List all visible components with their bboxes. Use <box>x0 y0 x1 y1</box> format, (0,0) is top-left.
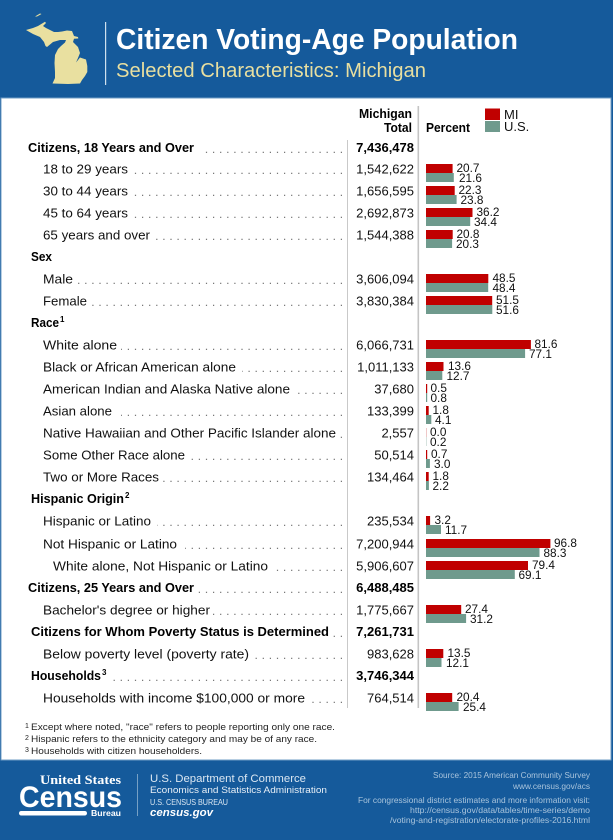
footnotes: 1 <box>25 723 29 730</box>
source text: http://census.gov/data/tables/time-series/demo <box>410 805 590 815</box>
row: Native Hawaiian and Other Pacific Islander alone: Native Hawaiian and Other Pacific Islander alone <box>43 426 336 441</box>
row: Households: 3 <box>102 668 107 677</box>
row: Female: 51.6 <box>496 303 519 317</box>
row: American Indian and Alaska Native alone: 37,680 <box>374 381 414 396</box>
row: White alone, Not Hispanic or Latino <box>53 558 555 582</box>
icon: Michigan map <box>26 14 87 84</box>
divider: logo rule <box>136 774 139 816</box>
row: Asian alone: 1.8 <box>432 403 449 417</box>
row: Native Hawaiian and Other Pacific Islander alone: 0.0 <box>430 425 447 439</box>
heading: Hispanic Origin: 2 <box>125 491 130 500</box>
logo: United States Census Bureau: Census <box>19 781 122 814</box>
footnotes: 3 <box>25 747 29 754</box>
row: Not Hispanic or Latino: Not Hispanic or Latino <box>43 537 177 552</box>
column heading: Michigan Total: Total <box>384 120 412 135</box>
row: Hispanic or Latino: 235,534 <box>367 513 414 528</box>
row: 45 to 64 years <box>43 205 499 229</box>
heading: Race: Race <box>31 315 59 330</box>
row: Asian alone: Asian alone <box>43 404 112 419</box>
row: Some Other Race alone: Some Other Race alone <box>43 448 185 463</box>
row: Some Other Race alone: 0.7 <box>431 447 447 461</box>
row: 65 years and over: 20.8 <box>456 227 480 241</box>
row: White alone, Not Hispanic or Latino: 5,906,607 <box>356 558 414 573</box>
logo: United States Census Bureau <box>19 772 122 818</box>
row: 18 to 29 years: 18 to 29 years <box>43 162 129 177</box>
row: Two or More Races: Two or More Races <box>43 470 160 485</box>
row: Two or More Races <box>43 469 449 493</box>
row: Bachelor's degree or higher: 31.2 <box>470 612 493 626</box>
row: Female <box>43 293 519 317</box>
row: Hispanic or Latino: Hispanic or Latino <box>43 514 151 529</box>
column heading: Michigan Total <box>359 106 412 135</box>
row: White alone: 77.1 <box>529 347 552 361</box>
row: Black or African American alone: 13.6 <box>448 359 471 373</box>
logo: United States Census Bureau: United States <box>40 772 121 787</box>
footnotes: Households with citizen householders. <box>31 746 202 757</box>
row: Male: 3,606,094 <box>356 271 414 286</box>
column rules <box>347 106 419 708</box>
source text: Source: 2015 American Community Survey <box>433 770 591 780</box>
row: White alone: White alone <box>43 338 117 353</box>
row: White alone, Not Hispanic or Latino: 69.1 <box>518 568 541 582</box>
heading: Hispanic Origin: Hispanic Origin <box>31 491 124 506</box>
row: Citizens, 25 Years and Over: 6,488,485 <box>356 580 414 595</box>
row: 45 to 64 years: 2,692,873 <box>356 205 414 220</box>
row: Households with income $100,000 or more: 20.4 <box>456 690 480 704</box>
row: Some Other Race alone: 50,514 <box>374 447 414 462</box>
row: Asian alone <box>43 403 451 427</box>
heading: Race: 1 <box>60 315 65 324</box>
row: Bachelor's degree or higher: 1,775,667 <box>356 602 414 617</box>
row: Asian alone: 4.1 <box>435 413 451 427</box>
row: Female: 3,830,384 <box>356 293 414 308</box>
row: Male: 48.4 <box>492 281 516 295</box>
row: White alone, Not Hispanic or Latino: White alone, Not Hispanic or Latino <box>53 559 268 574</box>
row: 45 to 64 years: 45 to 64 years <box>43 206 129 221</box>
footnotes: 2 <box>25 735 29 742</box>
row: Male: 48.5 <box>492 271 516 285</box>
title: Citizen Voting-Age Population <box>116 24 518 56</box>
row: 65 years and over: 1,544,388 <box>356 227 414 242</box>
row: Hispanic or Latino: 3.2 <box>434 513 451 527</box>
row: Bachelor's degree or higher: Bachelor's degree or higher <box>43 603 211 618</box>
row: 30 to 44 years: 30 to 44 years <box>43 184 129 199</box>
row: Citizens, 18 Years and Over: Citizens, 18 Years and Over <box>28 140 194 155</box>
row: Hispanic or Latino <box>43 513 467 537</box>
source text: www.census.gov/acs <box>512 781 590 791</box>
row: American Indian and Alaska Native alone <box>43 381 447 405</box>
row: Below poverty level (poverty rate) <box>43 646 471 670</box>
department text <box>150 773 327 819</box>
row: Not Hispanic or Latino <box>43 536 577 560</box>
row: Bachelor's degree or higher <box>43 602 493 626</box>
row: Bachelor's degree or higher: 27.4 <box>465 602 488 616</box>
row: Households with income $100,000 or more <box>43 690 486 714</box>
row: Two or More Races: 134,464 <box>367 469 414 484</box>
row: Citizens, 18 Years and Over <box>28 140 414 155</box>
row: White alone: 6,066,731 <box>356 337 414 352</box>
footnotes: Hispanic refers to the ethnicity category and may be of any race. <box>31 734 317 745</box>
row: Female: 51.5 <box>496 293 519 307</box>
source text: /voting-and-registration/electorate-profiles-2016.html <box>390 815 590 825</box>
source text: For congressional district estimates and more information visit: <box>358 795 590 805</box>
row: White alone: 81.6 <box>534 337 558 351</box>
panel: white table area <box>1 98 611 760</box>
row: Below poverty level (poverty rate): 983,628 <box>367 646 414 661</box>
row: 18 to 29 years: 20.7 <box>456 161 479 175</box>
row: 65 years and over <box>43 227 480 251</box>
row: Citizens, 25 Years and Over <box>28 580 414 595</box>
row: Two or More Races: 1.8 <box>432 469 449 483</box>
row: Two or More Races: 2.2 <box>432 479 449 493</box>
row: Not Hispanic or Latino: 7,200,944 <box>356 536 414 551</box>
row: Below poverty level (poverty rate): 13.5 <box>448 646 471 660</box>
row: Below poverty level (poverty rate): 12.1 <box>446 656 469 670</box>
legend: U.S. <box>504 119 529 134</box>
row: Citizens, 25 Years and Over: Citizens, 25 Years and Over <box>28 580 194 595</box>
row: 18 to 29 years: 21.6 <box>459 171 482 185</box>
row: Native Hawaiian and Other Pacific Islander alone: 0.2 <box>430 435 446 449</box>
row: American Indian and Alaska Native alone: American Indian and Alaska Native alone <box>43 382 290 397</box>
row: Not Hispanic or Latino: 88.3 <box>544 546 567 560</box>
row: Citizens, 18 Years and Over: 7,436,478 <box>356 140 414 155</box>
department text: census.gov <box>150 807 214 819</box>
legend: MI <box>504 107 518 122</box>
row: 30 to 44 years: 1,656,595 <box>356 183 414 198</box>
row: Male <box>43 271 516 295</box>
logo: United States Census Bureau: Bureau <box>91 809 121 818</box>
row: Citizens for Whom Poverty Status is Determined: 7,261,731 <box>356 624 414 639</box>
row: Native Hawaiian and Other Pacific Islander alone: 2,557 <box>381 425 414 440</box>
row: Not Hispanic or Latino: 96.8 <box>554 536 577 550</box>
row: Black or African American alone: Black or African American alone <box>43 360 236 375</box>
row: Hispanic or Latino: 11.7 <box>445 523 467 537</box>
row: 18 to 29 years <box>43 161 482 185</box>
source text <box>358 770 591 825</box>
department text: U.S. CENSUS BUREAU <box>150 798 228 807</box>
row: 45 to 64 years: 34.4 <box>474 215 497 229</box>
heading: Sex: Sex <box>31 249 53 264</box>
row: Households with income $100,000 or more: 25.4 <box>463 700 486 714</box>
row: Households <box>31 668 415 683</box>
row: Female: Female <box>43 294 87 309</box>
row: American Indian and Alaska Native alone: 0.5 <box>430 381 447 395</box>
row: Some Other Race alone: 3.0 <box>434 457 451 471</box>
footnotes <box>25 722 335 757</box>
legend <box>485 107 529 134</box>
row: Some Other Race alone <box>43 447 451 471</box>
row: Native Hawaiian and Other Pacific Islander alone <box>43 425 447 449</box>
row: 65 years and over: 20.3 <box>456 237 479 251</box>
row: Asian alone: 133,399 <box>367 403 414 418</box>
department text: Economics and Statistics Administration <box>150 785 327 796</box>
divider: header rule <box>105 22 106 85</box>
row: Households: Households <box>31 668 101 683</box>
footnotes: Except where noted, "race" refers to people reporting only one race. <box>31 722 335 733</box>
row: Households: 3,746,344 <box>356 668 415 683</box>
row: Below poverty level (poverty rate): Below poverty level (poverty rate) <box>43 647 249 662</box>
row: 30 to 44 years: 22.3 <box>458 183 482 197</box>
row: 45 to 64 years: 36.2 <box>476 205 499 219</box>
row: 18 to 29 years: 1,542,622 <box>356 161 414 176</box>
row: White alone <box>43 337 558 361</box>
row: 30 to 44 years <box>43 183 484 207</box>
row: Black or African American alone: 12.7 <box>446 369 469 383</box>
row: White alone, Not Hispanic or Latino: 79.4 <box>532 558 555 572</box>
row: Households with income $100,000 or more: Households with income $100,000 or more <box>43 691 305 706</box>
subtitle: Selected Characteristics: Michigan <box>116 60 426 82</box>
row: Households with income $100,000 or more: 764,514 <box>367 690 414 705</box>
row: 65 years and over: 65 years and over <box>43 228 151 243</box>
row: American Indian and Alaska Native alone: 0.8 <box>430 391 447 405</box>
row: Black or African American alone: 1,011,133 <box>357 359 414 374</box>
row: Black or African American alone <box>43 359 471 383</box>
column heading: Michigan Total: Michigan <box>359 106 412 121</box>
row: Citizens for Whom Poverty Status is Determined: Citizens for Whom Poverty Status is Determined <box>31 624 329 639</box>
row: Male: Male <box>43 272 73 287</box>
column heading: Percent: Percent <box>426 120 471 135</box>
department text: U.S. Department of Commerce <box>150 773 306 785</box>
row: 30 to 44 years: 23.8 <box>460 193 484 207</box>
